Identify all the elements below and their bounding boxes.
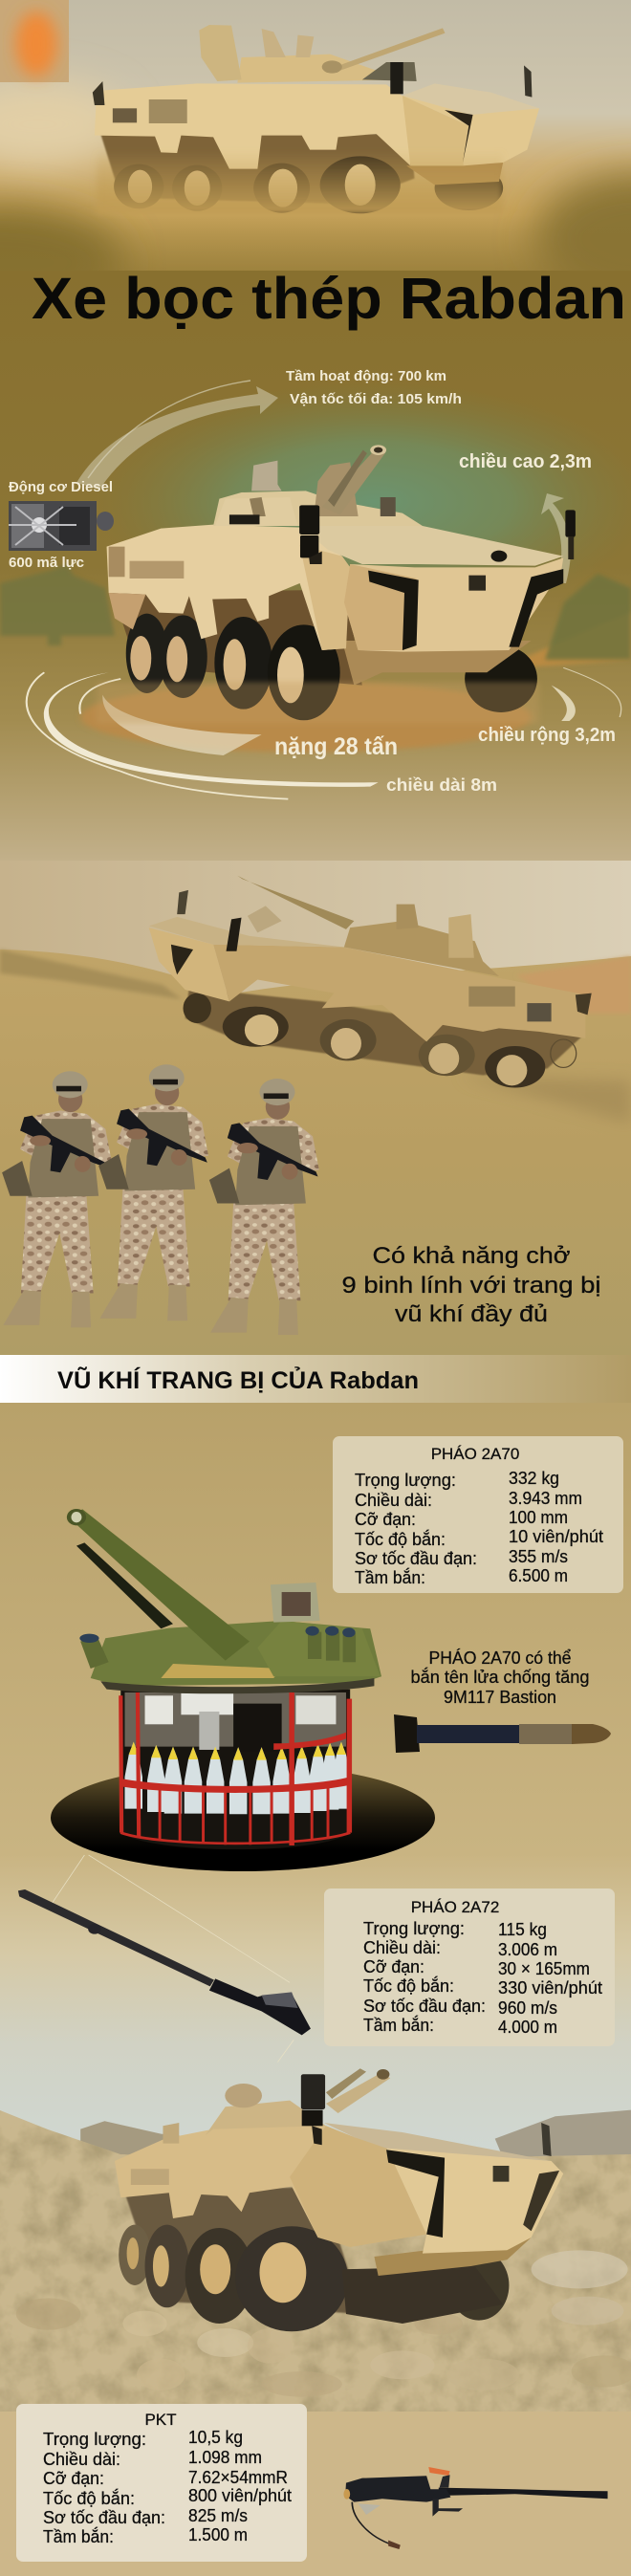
side rack	[130, 561, 184, 579]
info box: PKT: Tốc độ bắn:	[43, 2488, 135, 2508]
sight box	[271, 1583, 320, 1623]
rocky terrain scene	[0, 2110, 631, 2576]
info box: gun 2A72: Chiều dài:	[363, 1938, 441, 1957]
capacity text: Có khả năng chở	[373, 1243, 571, 1269]
spec labels: Tầm hoạt động: 700 km	[286, 369, 446, 384]
info box: gun 2A70: 100 mm	[509, 1508, 568, 1527]
spec labels: chiều cao 2,3m	[459, 451, 592, 472]
desert scene background	[0, 861, 631, 1355]
turret	[213, 491, 423, 526]
section banner: VŨ KHÍ TRANG BỊ CỦA Rabdan	[57, 1365, 419, 1394]
spec labels	[9, 369, 616, 795]
info box: gun 2A70: Chiều dài:	[355, 1491, 432, 1510]
info box: gun 2A70: Tốc độ bắn:	[355, 1529, 446, 1549]
desert vehicle	[149, 876, 592, 1087]
weapons section background	[0, 1403, 631, 2168]
range and speed arrows	[76, 381, 571, 583]
ammunition drum	[120, 1690, 350, 1849]
spec labels: nặng 28 tấn	[274, 733, 398, 760]
dark underbody	[124, 2187, 362, 2314]
three soldiers	[2, 1064, 319, 1335]
info box: gun 2A70: PHÁO 2A70	[431, 1445, 519, 1463]
info box: PKT: 10,5 kg	[188, 2428, 243, 2447]
info box: gun 2A72: 4.000 m	[498, 2018, 557, 2037]
rocky scene vehicle	[115, 2068, 563, 2331]
info box: PKT: 1.098 mm	[188, 2448, 262, 2467]
spec labels: Động cơ Diesel	[9, 479, 113, 495]
info box: gun 2A72: 3.006 m	[498, 1940, 557, 1959]
info box: PKT: Trọng lượng:	[43, 2430, 146, 2449]
info box: gun 2A72: Tầm bắn:	[363, 2015, 434, 2035]
ground turning rings	[27, 667, 621, 799]
info box: gun 2A70: Cỡ đạn:	[355, 1510, 416, 1529]
capacity text: 9 binh lính với trang bị	[342, 1273, 600, 1299]
info box: gun 2A70: Tầm bắn:	[355, 1567, 425, 1587]
missile caption: PHÁO 2A70 có thể	[428, 1648, 572, 1668]
info box: PKT: Chiều dài:	[43, 2450, 120, 2469]
info box: PKT: Cỡ đạn:	[43, 2469, 104, 2488]
info box: gun 2A72: 960 m/s	[498, 1998, 557, 2018]
turret body	[91, 1621, 381, 1686]
gun 2A72 barrel	[18, 1855, 311, 2063]
missile 9M117	[394, 1714, 611, 1753]
front plate	[386, 2147, 563, 2254]
info box: gun 2A70: Sơ tốc đầu đạn:	[355, 1549, 477, 1568]
mirrors	[299, 505, 319, 535]
dark underbody	[113, 590, 362, 686]
section banner	[0, 1355, 631, 1403]
hull side	[107, 525, 350, 650]
info box: gun 2A72: 115 kg	[498, 1920, 547, 1939]
PKT machine gun	[343, 2467, 608, 2549]
gun turret with ammunition carousel	[67, 1509, 381, 1849]
palm trees left	[0, 564, 115, 645]
hero photo: vehicle in the desert	[0, 0, 631, 320]
hero vehicle	[93, 25, 539, 213]
info box: gun 2A70: 355 m/s	[509, 1547, 568, 1566]
info box: gun 2A72: Tốc độ bắn:	[363, 1976, 454, 1996]
smoke launchers	[80, 1632, 356, 1669]
mirrors	[301, 2074, 325, 2109]
missile caption	[411, 1648, 589, 1707]
main vehicle	[97, 445, 576, 724]
blurred orange thumbnail corner	[0, 0, 69, 82]
hull side	[115, 2120, 354, 2238]
info box: gun 2A72: Sơ tốc đầu đạn:	[363, 1997, 486, 2016]
info box: gun 2A72: Trọng lượng:	[363, 1919, 465, 1938]
info box: PKT: 7.62×54mmR	[188, 2468, 288, 2487]
spec labels: Vận tốc tối đa: 105 km/h	[290, 392, 462, 407]
gun barrel	[69, 1509, 250, 1661]
hull front lower	[342, 641, 532, 686]
info box: gun 2A70: 3.943 mm	[509, 1489, 582, 1508]
info box: gun 2A72: 330 viên/phút	[498, 1978, 602, 1997]
info box: gun 2A70: 332 kg	[509, 1469, 559, 1488]
spec labels: 600 mã lực	[9, 555, 84, 571]
capacity text	[342, 1243, 600, 1327]
info box: PKT: 800 viên/phút	[188, 2486, 292, 2505]
specs panel background	[0, 271, 631, 861]
wheels	[126, 614, 537, 720]
turret shadow ellipse	[51, 1764, 435, 1871]
mountains	[80, 2110, 631, 2173]
wheels	[119, 2225, 509, 2331]
front plate	[344, 557, 563, 652]
info box: PKT: PKT	[144, 2411, 177, 2429]
info box: gun 2A72: PHÁO 2A72	[411, 1898, 499, 1916]
info box: PKT	[16, 2404, 307, 2562]
spec labels: chiều dài 8m	[386, 775, 497, 795]
rocks	[16, 2250, 631, 2397]
wheels	[184, 993, 545, 1087]
spec labels: chiều rộng 3,2m	[478, 725, 616, 746]
palm trees right	[545, 574, 631, 660]
rocky ground	[0, 2110, 631, 2412]
missile caption: bắn tên lửa chống tăng	[411, 1667, 589, 1687]
info box: PKT: 1.500 m	[188, 2525, 248, 2544]
info box: PKT: Sơ tốc đầu đạn:	[43, 2508, 165, 2527]
info box: gun 2A72: Cỡ đạn:	[363, 1957, 424, 1976]
capacity text: vũ khí đầy đủ	[395, 1301, 548, 1327]
black headlight strips	[368, 571, 419, 650]
info box: gun 2A70: 6.500 m	[509, 1566, 568, 1585]
engine illustration	[9, 501, 114, 551]
info box: gun 2A70: Trọng lượng:	[355, 1471, 456, 1490]
missile caption: 9M117 Bastion	[444, 1688, 556, 1707]
info box: gun 2A72	[324, 1888, 615, 2046]
dark underbody	[185, 988, 583, 1076]
info box: gun 2A70: 10 viên/phút	[509, 1527, 603, 1546]
info box: PKT: Tầm bắn:	[43, 2526, 114, 2546]
title band: Xe bọc thép Rabdan	[32, 266, 626, 331]
info box: PKT: 825 m/s	[188, 2506, 248, 2525]
info box: gun 2A72: 30 × 165mm	[498, 1959, 590, 1978]
turret and gun	[206, 2101, 326, 2135]
top deck	[300, 526, 563, 566]
info box: gun 2A70	[333, 1436, 623, 1593]
